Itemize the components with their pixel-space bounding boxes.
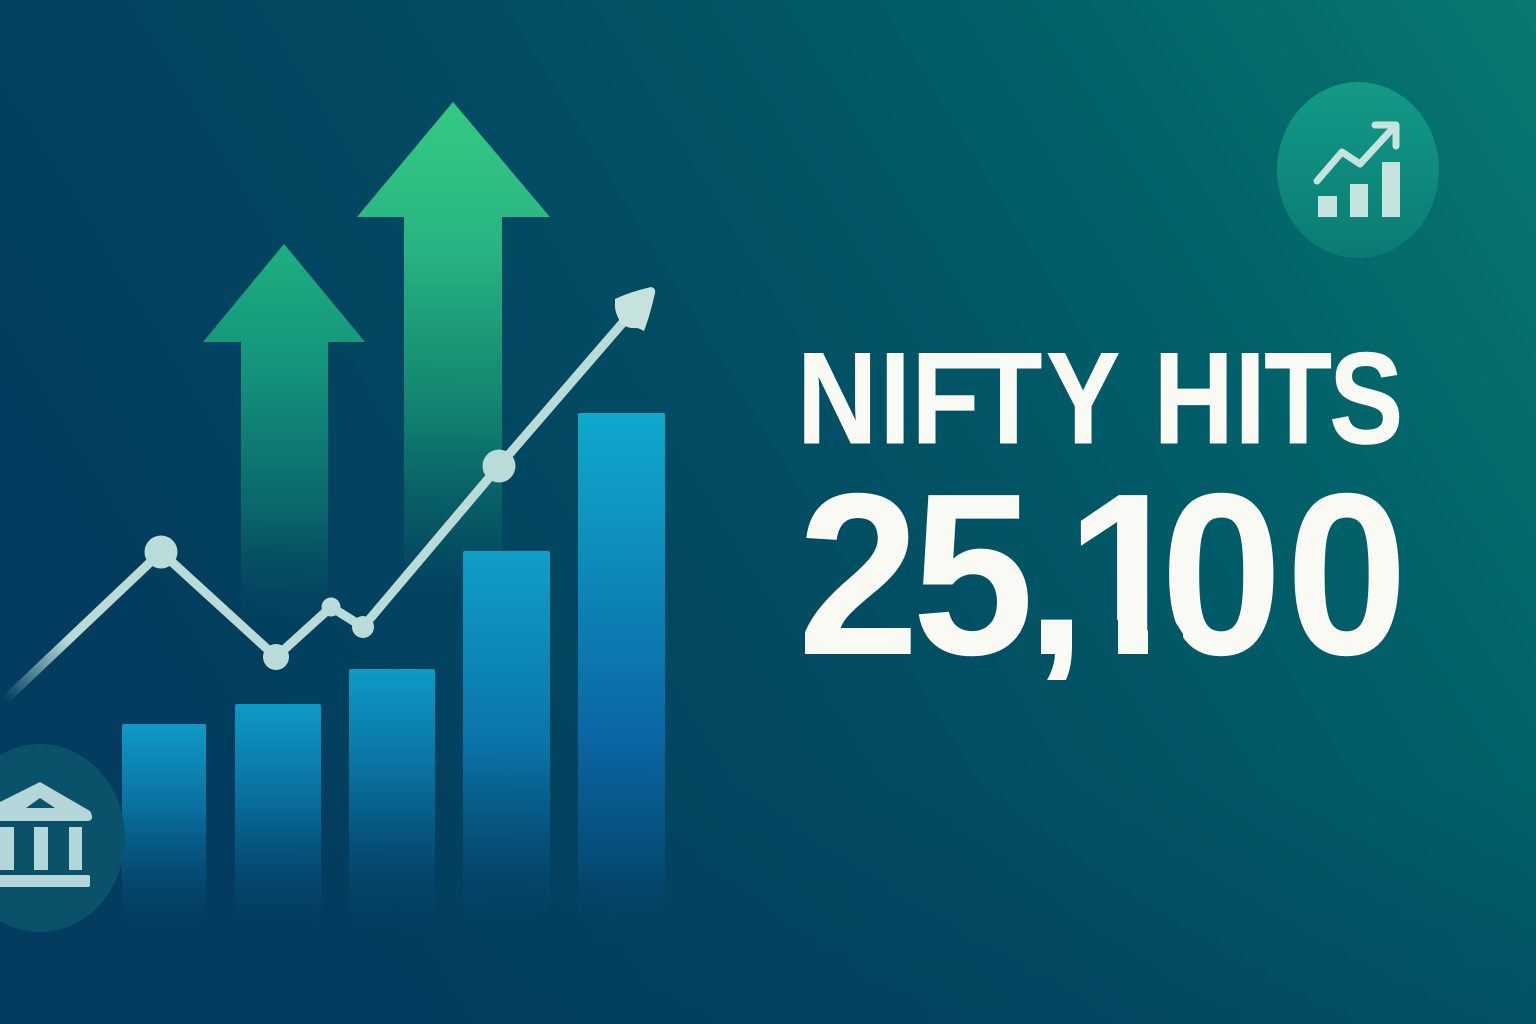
trend line	[5, 312, 632, 700]
bar 5	[578, 413, 665, 936]
icon: large green up arrow	[357, 102, 550, 590]
base	[0, 875, 90, 887]
columns	[0, 827, 14, 870]
rising line chart with arrow tip	[5, 287, 655, 700]
bar 4	[463, 551, 550, 936]
badge circle	[0, 744, 125, 932]
bar chart	[122, 413, 665, 936]
mini trend arrow	[1317, 125, 1396, 181]
icon: bank badge	[0, 744, 125, 932]
mini bars	[1318, 162, 1400, 217]
bar 3	[349, 669, 435, 936]
icon: growth chart badge	[1277, 82, 1439, 258]
bank building	[0, 782, 92, 887]
bar 1	[122, 724, 206, 936]
icon: small green up arrow	[203, 244, 365, 625]
bar 2	[235, 704, 321, 936]
line arrowhead	[615, 287, 655, 331]
headline number: 25,100: 25,100	[797, 445, 1408, 703]
headline: NIFTY HITS: NIFTY HITS	[797, 326, 1403, 471]
title	[804, 352, 1400, 680]
data points	[144, 450, 516, 670]
badge circle	[1277, 82, 1439, 258]
roof	[0, 782, 92, 821]
